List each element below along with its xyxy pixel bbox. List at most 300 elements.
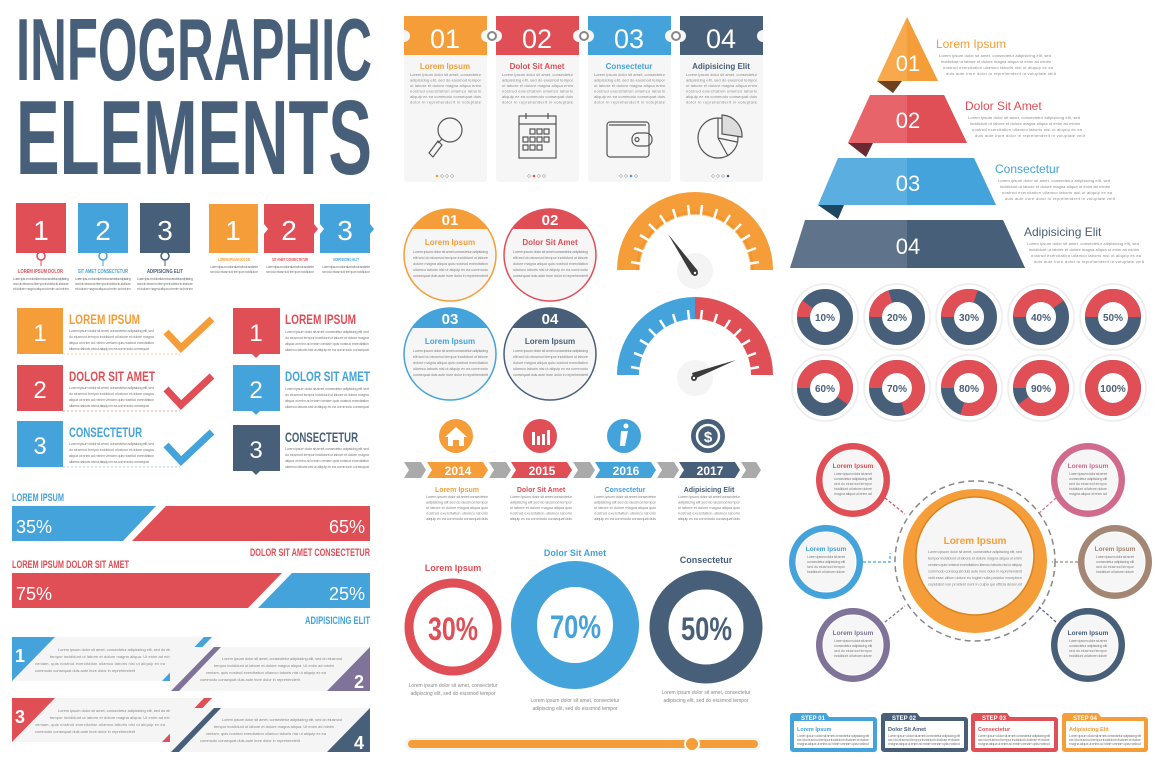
panel: ticket cards: aliquip ex ea commodo consequat duis: [686, 94, 757, 99]
panel: numbered circles: Lorem ipsum dolor sit amet consectetur adipisicing: [513, 348, 588, 353]
panel: numbered strips: commodo consequat duis aute irure dolor in reprehenderit: [35, 729, 136, 734]
panel: timeline: 2015: [529, 464, 556, 478]
panel: numbered circles: Lorem ipsum dolor sit amet consectetur adipisicing: [413, 348, 488, 353]
panel: numbered strips: 1: [15, 646, 25, 666]
panel: timeline: [404, 419, 761, 521]
panel: numbered strips: commodo consequat duis aute irure dolor in reprehenderit: [35, 668, 136, 673]
panel: percent donut grid: 40%: [1031, 313, 1051, 324]
panel: percentage bars: LOREM IPSUM: [12, 492, 64, 504]
pin 2: sed do eiusmod tempor incididunt ut labore: [75, 281, 132, 286]
panel: timeline: ut labore et dolore magna aliqua quis: [594, 505, 656, 510]
panel: checklist: Lorem ipsum dolor sit amet, consectetur adipisicing elit, sed: [69, 328, 154, 333]
panel: pointer boxes: ullamco laboris nisi ut aliquip ex ea commodo consequat: [285, 347, 370, 352]
panel: numbered circles: [400, 205, 600, 400]
panel: numbered strips: Lorem ipsum dolor sit amet, consectetur adipisicing elit, sed do eiusmod: [58, 708, 181, 713]
panel: numbered strips: tempor incididunt ut labore et dolore magna aliqua. Ut enim ad minim: [50, 715, 176, 720]
panel: timeline: Lorem Ipsum: [435, 487, 479, 494]
panel: timeline: Lorem ipsum dolor sit amet consectetur: [510, 494, 573, 499]
panel: pointer boxes: [233, 308, 370, 475]
panel: pointer boxes: ullamco laboris nisi ut aliquip ex ea commodo consequat: [285, 404, 370, 409]
panel: ticket cards: Lorem ipsum dolor sit amet, consectetur: [502, 72, 574, 77]
panel: step boxes: Lorem ipsum dolor sit amet consectetur adipisicing elit: [1069, 733, 1142, 738]
panel: ticket cards: ut labore et dolore magna aliqua enim: [594, 83, 666, 88]
panel: circle mind map: sed do eiusmod tempor: [834, 481, 873, 486]
panel: percentage bars: [12, 492, 370, 627]
panel: ticket cards: 03: [614, 24, 644, 54]
panel: percent donut grid: 60%: [815, 384, 835, 395]
panel: numbered circles: Dolor Sit Amet: [522, 238, 578, 247]
panel: big donuts: Lorem ipsum dolor sit amet, consectetur: [409, 683, 498, 689]
panel: circle mind map: Lorem ipsum dolor sit amet: [834, 471, 873, 476]
panel: big donuts: adipiscing elit, sed do eiusmod tempor: [663, 698, 749, 704]
panel: pyramid: duis aute irure dolor in reprehenderit in voluptate velit: [946, 71, 1057, 76]
panel: numbered circles: dolore magna aliqua quis nostrud exercitation: [513, 360, 588, 365]
panel: pyramid: 02: [896, 108, 920, 133]
panel: step boxes: Adipisicing Elit: [1069, 727, 1109, 733]
panel: timeline: 2016: [613, 464, 640, 478]
panel: ticket cards: Consectetur: [606, 62, 652, 71]
panel: circle mind map: consectetur adipisicing elit: [1096, 559, 1135, 564]
panel: step boxes: Consectetur: [978, 727, 1011, 733]
panel: ticket cards: 02: [522, 24, 552, 54]
panel: percentage bars: 25%: [329, 584, 365, 604]
panel: ticket cards: Lorem ipsum dolor sit amet, consectetur: [410, 72, 482, 77]
panel: pyramid: incididunt ut labore et dolore magna aliqua ut enim ad minim: [941, 59, 1052, 64]
icon: calendar: [519, 113, 556, 158]
pin 2: [75, 203, 132, 291]
pin 1: [13, 203, 70, 291]
panel: ticket cards: Adipisicing Elit: [692, 62, 750, 71]
pin 2: 2: [95, 215, 111, 246]
panel: ticket cards: nostrud exercitation ullamco laboris: [502, 88, 573, 94]
panel: ticket cards: adipisicing elit, sed do eiusmod tempor: [410, 78, 482, 82]
panel: step boxes: magna aliqua ut enim ad minim veniam quis nostrud: [978, 741, 1050, 746]
pin 1: sed do eiusmod tempor incididunt ut labore: [13, 281, 70, 286]
panel: checklist: aliqua ut enim ad minim veniam quis nostrud exercitation: [69, 397, 154, 402]
panel: ticket cards: adipisicing elit, sed do eiusmod tempor: [594, 78, 666, 82]
panel: numbered strips: veniam, quis nostrud exercitation ullamco laboris nisi ut aliquip ex ea: [35, 722, 166, 727]
panel: big donuts: Lorem ipsum dolor sit amet, consectetur: [531, 698, 620, 704]
panel: step boxes: magna aliqua ut enim ad minim veniam quis nostrud: [1069, 741, 1141, 746]
panel: percent donut grid: 30%: [959, 313, 979, 324]
panel: checklist: ullamco laboris nisi ut aliquip ex ea commodo consequat: [69, 403, 150, 408]
panel: timeline: Lorem ipsum dolor sit amet consectetur: [678, 494, 741, 499]
panel: circle mind map: tempor incididunt ut labore et dolore magna aliqua ut enim: [928, 556, 1023, 560]
panel: percentage bars: DOLOR SIT AMET CONSECTETUR: [250, 547, 370, 559]
panel: numbered strips: veniam, quis nostrud exercitation ullamco laboris nisi ut aliquip ex ea: [206, 731, 327, 736]
chart: orange gauge: [628, 203, 762, 289]
panel: checklist: LOREM IPSUM: [69, 311, 140, 327]
panel: circle mind map: incididunt ut labore dolore: [807, 569, 846, 574]
panel: timeline: nostrud exercitation ullamco laboris: [426, 510, 488, 516]
panel: ticket cards: 01: [430, 24, 460, 54]
panel: numbered strips: tempor incididunt ut labore et dolore magna aliqua. Ut enim ad minim: [50, 654, 176, 659]
panel: circle mind map: Lorem ipsum dolor sit amet: [1069, 638, 1108, 643]
panel: ticket cards: nostrud exercitation ullamco laboris: [686, 88, 757, 94]
panel: ticket cards: Lorem Ipsum: [420, 62, 470, 71]
panel: ticket cards: dolor in reprehenderit in voluptate: [594, 100, 666, 104]
panel: numbered circles: ullamco laboris nisi ut aliquip ex ea commodo: [513, 267, 589, 272]
panel: timeline: adipisicing elit sed do eiusmod tempor: [594, 500, 657, 504]
panel: ticket cards: adipisicing elit, sed do eiusmod tempor: [686, 78, 758, 82]
panel: percent donut grid: [792, 284, 1146, 421]
panel: numbered circles: Lorem Ipsum: [425, 238, 475, 247]
panel: pointer boxes: aliqua ut enim ad minim veniam quis nostrud exercitation: [285, 341, 369, 346]
icon: dollar: $: [704, 429, 713, 446]
panel: checklist: ullamco laboris nisi ut aliquip ex ea commodo consequat: [69, 346, 150, 351]
panel: big donuts: 50%: [681, 611, 732, 647]
panel: ticket cards: ut labore et dolore magna aliqua enim: [686, 83, 758, 88]
panel: timeline: adipisicing elit sed do eiusmod tempor: [678, 500, 741, 504]
panel: ticket cards: ut labore et dolore magna aliqua enim: [502, 83, 574, 88]
panel: arrow steps: sed do eiusmod tempor incididunt: [322, 269, 371, 274]
panel: ticket cards: Lorem ipsum dolor sit amet, consectetur: [686, 72, 758, 77]
panel: big donuts: adipiscing elit, sed do eiusmod tempor: [410, 691, 496, 697]
panel: pointer boxes: do eiusmod tempor incididunt ut labore et dolore magna: [285, 392, 370, 397]
panel: circle mind map: consectetur adipisicing elit: [834, 643, 873, 648]
panel: percentage bars: 75%: [16, 584, 52, 604]
panel: timeline: aliquip ex ea commodo consequat duis: [510, 516, 572, 521]
panel: timeline: aliquip ex ea commodo consequat duis: [426, 516, 488, 521]
panel: step boxes: magna aliqua ut enim ad minim veniam quis nostrud: [888, 741, 960, 746]
pin 2: Lorem ipsum dolor sit amet consectetur adipisicing: [75, 276, 131, 281]
panel: step boxes: STEP 02: [892, 716, 917, 722]
panel: circle mind map: Lorem Ipsum: [1095, 546, 1136, 553]
panel: percent donut grid: 20%: [887, 313, 907, 324]
panel: numbered strips: 3: [15, 707, 25, 727]
panel: numbered strips: tempor incididunt ut labore et dolore magna aliqua. Ut enim ad minim: [214, 663, 335, 668]
panel: numbered circles: consequat duis aute irure dolor in reprehenderit: [513, 372, 589, 377]
panel: numbered strips: Lorem ipsum dolor sit amet, consectetur adipisicing elit, sed do eiusmod: [58, 647, 181, 652]
panel: arrow steps: 3: [337, 215, 353, 246]
panel: step boxes: sed do eiusmod tempor incididunt ut labore et dolore: [797, 737, 870, 742]
pin 3: Lorem ipsum dolor sit amet consectetur adipisicing: [137, 276, 193, 281]
panel: ticket cards: adipisicing elit, sed do eiusmod tempor: [502, 78, 574, 82]
panel: circle mind map: commodo consequat duis aute irure dolor in reprehenderit: [928, 568, 1023, 574]
panel: numbered strips: 4: [354, 733, 364, 753]
panel: pyramid: Consectetur: [995, 162, 1060, 176]
panel: checklist: 3: [33, 433, 47, 460]
panel: circle mind map: incididunt ut labore dolore: [1069, 486, 1108, 491]
panel: numbered circles: Lorem ipsum dolor sit amet consectetur adipisicing: [513, 249, 588, 254]
panel: circle mind map: Lorem Ipsum: [1068, 463, 1109, 470]
pin 1: Lorem ipsum dolor sit amet consectetur adipisicing: [13, 276, 69, 281]
panel: pyramid: nostrud exercitation ullamco laboris nisi ut aliquip ex ea: [1002, 190, 1113, 195]
panel: numbered circles: 02: [542, 212, 558, 229]
panel: pyramid: Lorem ipsum dolor sit amet, consectetur adipisicing elit, sed: [1027, 241, 1139, 246]
panel: pointer boxes: aliqua ut enim ad minim veniam quis nostrud exercitation: [285, 398, 369, 403]
panel: step boxes: Lorem ipsum dolor sit amet consectetur adipisicing elit: [797, 733, 870, 738]
panel: step boxes: STEP 01: [801, 716, 826, 722]
panel: arrow steps: ADIPISICING ELIT: [333, 257, 359, 262]
panel: timeline: Lorem ipsum dolor sit amet consectetur: [594, 494, 657, 499]
panel: timeline: nostrud exercitation ullamco laboris: [594, 510, 656, 516]
panel: timeline: ut labore et dolore magna aliqua quis: [426, 505, 488, 510]
icon: magnifier: [429, 118, 462, 157]
panel: numbered circles: ullamco laboris nisi ut aliquip ex ea commodo: [513, 366, 589, 371]
panel: percent donut grid: 70%: [887, 384, 907, 395]
panel: pointer boxes: 2: [249, 377, 263, 404]
panel: ticket cards: Dolot Sit Amet: [510, 62, 565, 71]
panel: arrow steps: 2: [281, 215, 297, 246]
panel: numbered circles: dolore magna aliqua quis nostrud exercitation: [413, 261, 488, 266]
panel: circle mind map: Lorem Ipsum: [944, 536, 1006, 547]
panel: numbered circles: 01: [442, 212, 458, 229]
panel: circle mind map: consectetur adipisicing elit: [1069, 643, 1108, 648]
panel: step boxes: magna aliqua ut enim ad minim veniam quis nostrud: [797, 741, 869, 746]
pin 2: et dolore magna aliqua ut enim ad minim: [75, 286, 132, 291]
panel: checklist: [17, 308, 212, 467]
panel: timeline: Lorem ipsum dolor sit amet consectetur: [426, 494, 489, 499]
panel: numbered strips: commodo consequat duis aute irure dolor in reprehenderit: [200, 738, 301, 743]
panel: percent donut grid: 10%: [815, 313, 835, 324]
panel: ticket cards: [404, 16, 763, 182]
panel: circle mind map: [789, 443, 1152, 682]
pin 1: LOREM IPSUM DOLOR: [18, 269, 63, 275]
panel: pointer boxes: ullamco laboris nisi ut aliquip ex ea commodo consequat: [285, 464, 370, 469]
panel: checklist: 1: [33, 320, 47, 347]
pin 3: 3: [157, 215, 173, 246]
panel: percent donut grid: 80%: [959, 384, 979, 395]
panel: checklist: aliqua ut enim ad minim veniam quis nostrud exercitation: [69, 340, 154, 345]
panel: circle mind map: Lorem ipsum dolor sit amet, consectetur adipisicing elit, sed: [928, 549, 1022, 554]
panel: circle mind map: Lorem Ipsum: [833, 630, 874, 637]
panel: step boxes: Dolor Sit Amet: [888, 727, 926, 733]
title: [16, 0, 372, 197]
panel: step boxes: STEP 03: [982, 716, 1007, 722]
panel: ticket cards: dolor in reprehenderit in voluptate: [502, 100, 574, 104]
panel: pointer boxes: Lorem ipsum dolor sit amet, consectetur adipisicing elit, sed: [285, 386, 369, 391]
panel: ticket cards: Lorem ipsum dolor sit amet, consectetur: [594, 72, 666, 77]
panel: pyramid: nostrud exercitation ullamco laboris nisi ut aliquip ex ea: [1031, 253, 1142, 258]
panel: arrow steps: LOREM IPSUM DOLOR: [218, 257, 250, 262]
panel: numbered circles: elit sed do eiusmod tempor incididunt ut labore: [513, 255, 589, 260]
panel: numbered circles: ullamco laboris nisi ut aliquip ex ea commodo: [413, 366, 489, 371]
panel: timeline: adipisicing elit sed do eiusmod tempor: [426, 500, 489, 504]
panel: pyramid: 01: [896, 51, 920, 76]
panel: pyramid: incididunt ut labore et dolore magna aliqua ut enim ad minim: [1029, 247, 1140, 252]
panel: ticket cards: 04: [706, 24, 736, 54]
panel: arrow steps: Lorem ipsum dolor sit amet consectetur: [266, 264, 315, 269]
panel: numbered circles: dolore magna aliqua quis nostrud exercitation: [513, 261, 588, 266]
icon: dollar: [691, 419, 725, 453]
panel: numbered circles: consequat duis aute irure dolor in reprehenderit: [413, 372, 489, 377]
panel: numbered strips: Lorem ipsum dolor sit amet, consectetur adipisicing elit, sed do eiusmod: [222, 656, 342, 661]
panel: arrow steps: Lorem ipsum dolor sit amet consectetur: [322, 264, 371, 269]
panel: checklist: do eiusmod tempor incididunt ut labore et dolore magna: [69, 391, 155, 396]
panel: big donuts: adipiscing elit, sed do eiusmod tempor: [532, 706, 618, 712]
panel: ticket cards: nostrud exercitation ullamco laboris: [410, 88, 481, 94]
panel: pyramid: 03: [896, 171, 920, 196]
panel: circle mind map: incididunt ut labore dolore: [834, 486, 873, 491]
panel: pyramid: nostrud exercitation ullamco laboris nisi ut aliquip ex ea: [972, 127, 1083, 132]
pin 1: 1: [33, 215, 49, 246]
pin 3: [137, 203, 194, 291]
panel: numbered strips: [12, 637, 370, 753]
panel: numbered circles: elit sed do eiusmod tempor incididunt ut labore: [413, 255, 489, 260]
panel: percentage bars: ADIPISICING ELIT: [305, 615, 370, 627]
panel: numbered circles: Lorem Ipsum: [425, 337, 475, 346]
panel: circle mind map: sed do eiusmod tempor: [1069, 648, 1108, 653]
icon: info: [607, 419, 641, 453]
panel: pointer boxes: CONSECTETUR: [285, 429, 358, 445]
panel: numbered circles: Lorem ipsum dolor sit amet consectetur adipisicing: [413, 249, 488, 254]
panel: pointer boxes: aliqua ut enim ad minim veniam quis nostrud exercitation: [285, 458, 369, 463]
panel: percent donut grid: 100%: [1100, 384, 1126, 395]
panel: arrow steps: 1: [225, 215, 241, 246]
title: INFOGRAPHIC: [16, 0, 372, 99]
panel: percent donut grid: 90%: [1031, 384, 1051, 395]
panel: timeline: adipisicing elit sed do eiusmod tempor: [510, 500, 573, 504]
panel: numbered circles: consequat duis aute irure dolor in reprehenderit: [513, 273, 589, 278]
panel: numbered circles: elit sed do eiusmod tempor incididunt ut labore: [413, 354, 489, 359]
panel: numbered pins: [13, 203, 194, 291]
panel: big donuts: 70%: [550, 609, 601, 645]
panel: step boxes: sed do eiusmod tempor incididunt ut labore et dolore: [888, 737, 961, 742]
panel: circle mind map: magna aliqua ut enim ad: [834, 491, 872, 496]
panel: timeline: ut labore et dolore magna aliqua quis: [678, 505, 740, 510]
panel: ticket cards: dolor in reprehenderit in voluptate: [410, 100, 482, 104]
panel: circle mind map: incididunt ut labore dolore: [834, 653, 873, 658]
panel: pointer boxes: Lorem ipsum dolor sit amet, consectetur adipisicing elit, sed: [285, 329, 369, 334]
pin 3: sed do eiusmod tempor incididunt ut labore: [137, 281, 194, 286]
panel: timeline: aliquip ex ea commodo consequat duis: [594, 516, 656, 521]
panel: numbered circles: ullamco laboris nisi ut aliquip ex ea commodo: [413, 267, 489, 272]
panel: pyramid: incididunt ut labore et dolore magna aliqua ut enim ad minim: [970, 121, 1081, 126]
panel: checklist: DOLOR SIT AMET: [69, 368, 155, 384]
title: ELEMENTS: [16, 79, 372, 197]
panel: numbered strips: tempor incididunt ut labore et dolore magna aliqua. Ut enim ad minim: [214, 724, 335, 729]
panel: arrow steps: Lorem ipsum dolor sit amet consectetur: [210, 264, 259, 269]
pin 3: ADIPISICING ELIT: [147, 269, 183, 275]
panel: pyramid: duis aute irure dolor in reprehenderit in voluptate velit: [1034, 259, 1145, 264]
panel: checklist: ullamco laboris nisi ut aliquip ex ea commodo consequat: [69, 459, 150, 464]
panel: step boxes: sed do eiusmod tempor incididunt ut labore et dolore: [1069, 737, 1142, 742]
panel: step boxes: Lorem ipsum dolor sit amet consectetur adipisicing elit: [888, 733, 961, 738]
panel: pointer boxes: 3: [249, 437, 263, 464]
panel: circle mind map: Lorem Ipsum: [1068, 630, 1109, 637]
panel: numbered strips: Lorem ipsum dolor sit amet, consectetur adipisicing elit, sed do eiusmod: [222, 717, 342, 722]
panel: circle mind map: Lorem ipsum dolor sit amet: [807, 554, 846, 559]
panel: circle mind map: Lorem ipsum dolor sit amet: [1069, 471, 1108, 476]
panel: checklist: do eiusmod tempor incididunt ut labore et dolore magna: [69, 334, 155, 339]
panel: timeline: Dolor Sit Amet: [517, 487, 566, 494]
panel: ticket cards: aliquip ex ea commodo consequat duis: [410, 94, 481, 99]
panel: timeline: aliquip ex ea commodo consequat duis: [678, 516, 740, 521]
icon: bar chart: [523, 419, 557, 453]
panel: checklist: Lorem ipsum dolor sit amet, consectetur adipisicing elit, sed: [69, 385, 154, 390]
panel: numbered circles: Lorem Ipsum: [525, 337, 575, 346]
panel: pointer boxes: 1: [249, 320, 263, 347]
panel: timeline: nostrud exercitation ullamco laboris: [678, 510, 740, 516]
panel: arrow steps: sed do eiusmod tempor incididunt: [266, 269, 315, 274]
pin 2: SIT AMET CONSECTETUR: [78, 269, 128, 275]
icon: pie chart: [698, 115, 742, 158]
panel: ticket cards: ut labore et dolore magna aliqua enim: [410, 83, 482, 88]
panel: arrow steps: SIT AMET CONSECTETUR: [272, 257, 308, 262]
panel: pyramid: Lorem ipsum dolor sit amet, consectetur adipisicing elit, sed: [998, 178, 1110, 183]
pin 1: et dolore magna aliqua ut enim ad minim: [13, 286, 70, 291]
panel: circle mind map: sed do eiusmod tempor: [807, 564, 846, 569]
panel: big donuts: Lorem Ipsum: [425, 563, 481, 573]
panel: pyramid: Adipisicing Elit: [1024, 225, 1102, 239]
panel: pointer boxes: DOLOR SIT AMET: [285, 368, 370, 384]
panel: checklist: CONSECTETUR: [69, 424, 142, 440]
panel: circle mind map: consectetur adipisicing elit: [807, 559, 846, 564]
panel: arrow steps: sed do eiusmod tempor incididunt: [210, 269, 259, 274]
panel: numbered strips: 2: [354, 672, 364, 692]
panel: pyramid: Lorem ipsum dolor sit amet, consectetur adipisicing elit, sed: [939, 53, 1051, 58]
panel: circle mind map: sed do eiusmod tempor: [834, 648, 873, 653]
panel: big donuts: [409, 548, 753, 712]
panel: circle mind map: Lorem ipsum dolor sit amet: [834, 638, 873, 643]
panel: circle mind map: incididunt ut labore dolore: [1069, 653, 1108, 658]
panel: timeline: Consectetur: [605, 487, 646, 494]
panel: big donuts: Dolor Sit Amet: [544, 548, 606, 558]
panel: pyramid: incididunt ut labore et dolore magna aliqua ut enim ad minim: [1000, 184, 1111, 189]
panel: pyramid: 04: [896, 234, 920, 259]
panel: step boxes: Lorem ipsum dolor sit amet consectetur adipisicing elit: [978, 733, 1051, 738]
panel: pyramid: [790, 17, 1145, 268]
panel: circle mind map: magna aliqua ut enim ad: [1069, 491, 1107, 496]
pin 3: et dolore magna aliqua ut enim ad minim: [137, 286, 194, 291]
panel: circle mind map: veniam quis nostrud exercitation ullamco laboris nisi ut aliquip: [928, 562, 1023, 567]
panel: percentage bars: LOREM IPSUM DOLOR SIT AMET: [12, 559, 129, 571]
panel: numbered circles: elit sed do eiusmod tempor incididunt ut labore: [513, 354, 589, 359]
panel: circle mind map: sed do eiusmod tempor: [1096, 564, 1135, 569]
panel: checklist: 2: [33, 377, 47, 404]
panel: pointer boxes: do eiusmod tempor incididunt ut labore et dolore magna: [285, 452, 370, 457]
panel: checklist: aliqua ut enim ad minim veniam quis nostrud exercitation: [69, 453, 154, 458]
panel: ticket cards: dolor in reprehenderit in voluptate: [686, 100, 758, 104]
panel: step boxes: sed do eiusmod tempor incididunt ut labore et dolore: [978, 737, 1051, 742]
panel: numbered circles: 04: [542, 311, 559, 328]
panel: circle mind map: consectetur adipisicing elit: [834, 476, 873, 481]
panel: step boxes: Lorem Ipsum: [797, 727, 832, 733]
panel: ticket cards: nostrud exercitation ullamco laboris: [594, 88, 665, 94]
panel: numbered circles: dolore magna aliqua quis nostrud exercitation: [413, 360, 488, 365]
panel: pyramid: nostrud exercitation ullamco laboris nisi ut aliquip ex ea: [943, 65, 1054, 70]
panel: percentage bars: 65%: [329, 517, 365, 537]
panel: pyramid: duis aute irure dolor in reprehenderit in voluptate velit: [975, 133, 1086, 138]
panel: timeline: Adipisicing Elit: [684, 487, 735, 494]
icon: house: [439, 419, 473, 453]
chart: blue-red gauge: [628, 308, 762, 396]
panel: circle mind map: incididunt ut labore dolore: [1096, 569, 1135, 574]
panel: checklist: do eiusmod tempor incididunt ut labore et dolore magna: [69, 447, 155, 452]
panel: timeline: 2017: [697, 464, 724, 478]
panel: circle mind map: Lorem Ipsum: [833, 463, 874, 470]
panel: checklist: Lorem ipsum dolor sit amet, consectetur adipisicing elit, sed: [69, 441, 154, 446]
panel: timeline: nostrud exercitation ullamco laboris: [510, 510, 572, 516]
panel: circle mind map: Lorem ipsum dolor sit amet: [1096, 554, 1135, 559]
panel: pyramid: duis aute irure dolor in reprehenderit in voluptate velit: [1005, 196, 1116, 201]
panel: pointer boxes: LOREM IPSUM: [285, 311, 356, 327]
panel: percentage bars: 35%: [16, 517, 52, 537]
panel: ticket cards: aliquip ex ea commodo consequat duis: [502, 94, 573, 99]
panel: ticket cards: aliquip ex ea commodo consequat duis: [594, 94, 665, 99]
panel: numbered strips: commodo consequat duis aute irure dolor in reprehenderit: [200, 677, 301, 682]
panel: numbered circles: 03: [442, 311, 458, 328]
panel: timeline: ut labore et dolore magna aliqua quis: [510, 505, 572, 510]
icon: wallet: [607, 122, 652, 157]
panel: big donuts: Lorem ipsum dolor sit amet, consectetur: [662, 690, 751, 696]
panel: numbered strips: veniam, quis nostrud exercitation ullamco laboris nisi ut aliquip ex ea: [35, 661, 166, 666]
panel: step boxes: [790, 713, 1148, 752]
panel: pyramid: Lorem Ipsum: [936, 37, 1006, 51]
panel: percent donut grid: 50%: [1103, 313, 1123, 324]
panel: circle mind map: Lorem Ipsum: [806, 546, 847, 553]
